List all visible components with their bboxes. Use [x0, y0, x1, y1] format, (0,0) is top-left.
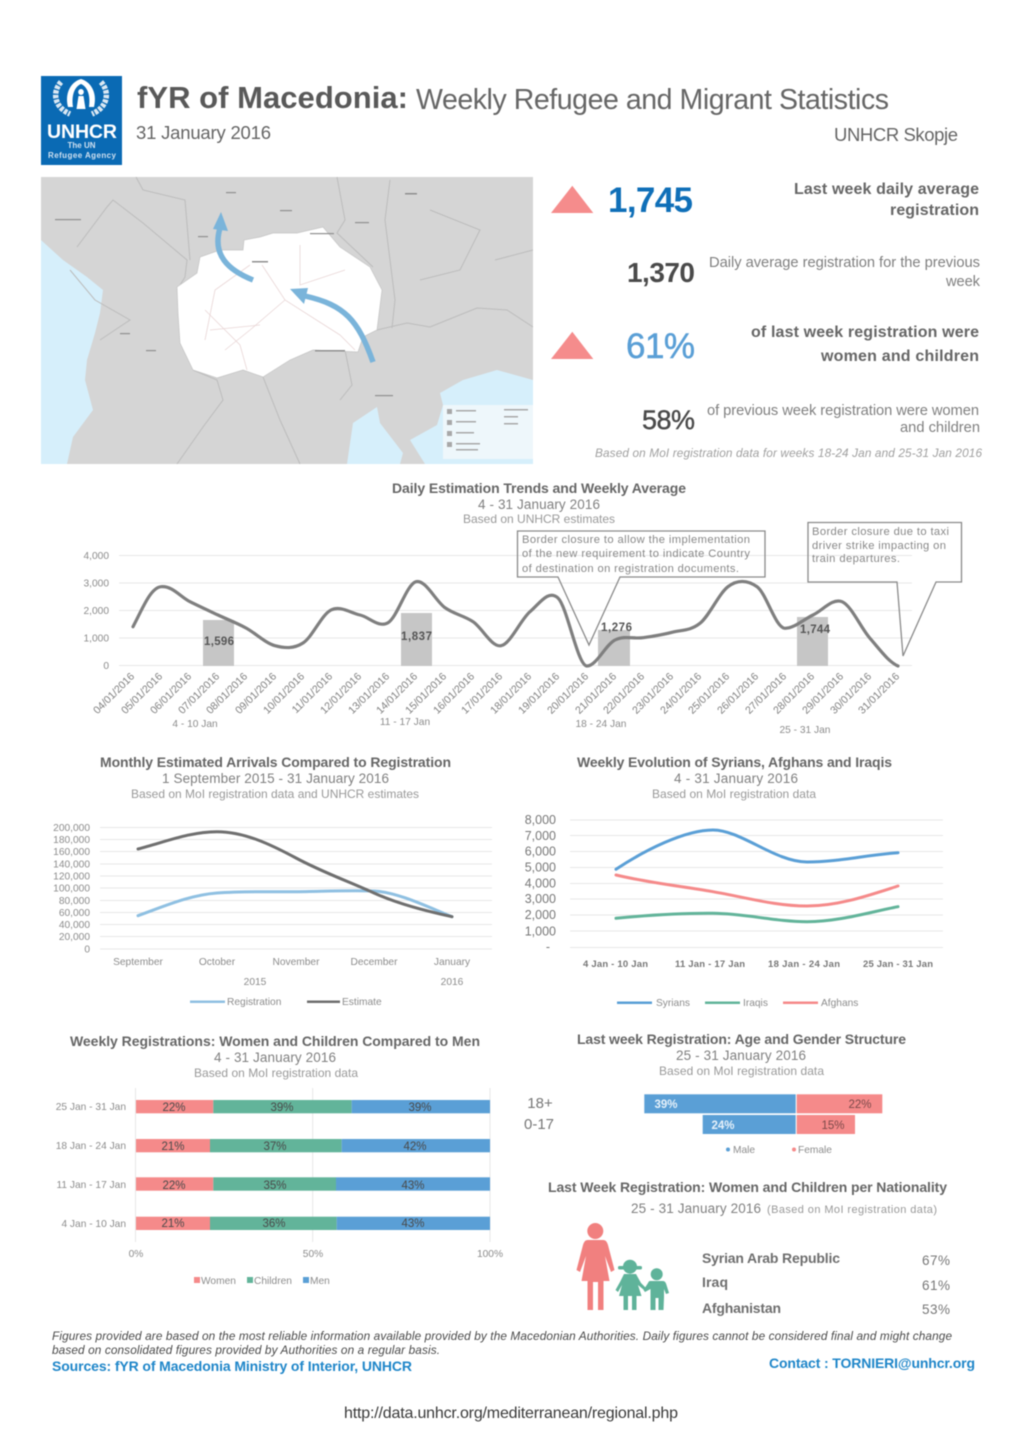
heading — [100, 754, 451, 801]
pyramid bars: 15% — [821, 1120, 845, 1132]
row: 11 - 17 Jan — [57, 1177, 490, 1192]
date axis labels: 27/01/2016 — [743, 671, 789, 717]
y axis labels: 4,000 — [525, 876, 556, 890]
UNHCR logo: UNHCR — [47, 121, 117, 143]
row: 18 - 24 Jan: 37% — [263, 1141, 287, 1153]
heading: Weekly Evolution of Syrians, Afghans and Iraqis — [577, 754, 892, 770]
fYR of Macedonia territory — [177, 227, 382, 378]
daily estimate line — [133, 581, 898, 666]
row: 11 - 17 Jan: 43% — [401, 1180, 425, 1192]
row: 25 - 31 Jan: 39% — [408, 1102, 432, 1114]
arrow: entry from Greece — [290, 288, 373, 362]
row: 4 - 10 Jan: 36% — [262, 1218, 286, 1230]
row: 18 - 24 Jan: 42% — [403, 1141, 427, 1153]
date: 31 January 2016 — [136, 122, 271, 143]
month labels: 2016 — [441, 977, 464, 988]
weekly average bars — [203, 613, 828, 666]
label: previous week women and children: of previous week registration were women — [707, 403, 979, 419]
date axis labels: 06/01/2016 — [148, 671, 194, 717]
date axis labels: 16/01/2016 — [431, 671, 477, 717]
nationality table: Afghanistan — [702, 1300, 781, 1316]
figure: 58%: 58% — [642, 405, 695, 435]
date axis labels: 31/01/2016 — [856, 671, 902, 717]
heading: 25 - 31 January 2016 — [676, 1048, 806, 1063]
y axis labels: 8,000 — [525, 813, 556, 827]
arrow: northbound route — [213, 212, 253, 280]
pyramid bars: 39% — [654, 1099, 678, 1111]
legend: Estimate — [342, 997, 382, 1008]
heading — [548, 1179, 947, 1216]
date axis labels: 17/01/2016 — [459, 671, 505, 717]
contact: Contact : TORNIERI@unhcr.org — [769, 1355, 975, 1371]
heading: Monthly Estimated Arrivals Compared to Registration — [100, 754, 451, 770]
map legend — [443, 405, 533, 459]
date axis labels: 18/01/2016 — [488, 671, 534, 717]
weekly average values: 1,276 — [601, 622, 632, 634]
week labels: 18 Jan - 24 Jan — [768, 959, 840, 970]
callout: taxi driver strike: train departures. — [812, 553, 900, 565]
heading: Based on MoI registration data — [659, 1064, 824, 1078]
heading: Daily Estimation Trends and Weekly Average — [392, 480, 686, 496]
row: 11 - 17 Jan: 22% — [162, 1180, 186, 1192]
pyramid bars: 22% — [848, 1099, 872, 1111]
legend: Women — [201, 1276, 236, 1287]
heading: 4 - 31 January 2016 — [674, 771, 798, 786]
weekly average values: 1,837 — [401, 631, 432, 643]
date axis labels: 05/01/2016 — [119, 671, 165, 717]
url: http://data.unhcr.org/mediterranean/regional.php — [344, 1405, 678, 1422]
y axis labels: 160,000 — [53, 847, 90, 858]
row: 18 - 24 Jan — [56, 1139, 490, 1153]
data note: Based on MoI registration data for weeks 18-24 Jan and 25-31 Jan 2016 — [595, 446, 982, 460]
callout: border closure registration requirement — [518, 531, 765, 645]
age labels: 0-17 — [524, 1116, 554, 1133]
date axis labels: 29/01/2016 — [800, 671, 846, 717]
legend — [194, 1276, 330, 1287]
label: previous week average — [709, 255, 981, 290]
roads — [205, 245, 355, 370]
heading: Based on MoI registration data and UNHCR estimates — [131, 787, 419, 801]
weekly average values: 1,744 — [800, 624, 831, 636]
disclaimer: Figures provided are based on the most reliable information available provided by the Macedonian Authorities. Daily figures cannot be considered final and might change — [52, 1329, 952, 1343]
heading — [577, 1031, 906, 1078]
UNHCR logo: The UN — [68, 141, 96, 150]
nationality table: 67% — [922, 1253, 950, 1268]
date axis labels: 19/01/2016 — [516, 671, 562, 717]
footer — [52, 1329, 975, 1422]
row: 25 - 31 Jan: 22% — [162, 1102, 186, 1114]
y axis labels: 1,000 — [84, 634, 109, 644]
y axis labels — [525, 813, 556, 954]
nationality table: 61% — [922, 1278, 950, 1293]
heading: Based on MoI registration data — [194, 1066, 358, 1080]
y axis labels: 1,000 — [525, 924, 556, 938]
nationality table: Iraq — [702, 1274, 728, 1290]
row: 4 - 10 Jan: 4 Jan - 10 Jan — [61, 1219, 126, 1230]
date axis labels: 09/01/2016 — [233, 671, 279, 717]
date axis labels: 12/01/2016 — [318, 671, 364, 717]
row: 4 - 10 Jan: 21% — [161, 1218, 185, 1230]
date axis labels: 04/01/2016 — [91, 671, 137, 717]
estimate line — [138, 832, 452, 917]
row: 4 - 10 Jan: 43% — [401, 1218, 425, 1230]
chart: age and gender structure — [524, 1031, 906, 1156]
panel: women and children per nationality — [548, 1179, 950, 1317]
heading: Based on MoI registration data — [652, 787, 816, 801]
age labels — [524, 1095, 554, 1133]
heading — [70, 1033, 480, 1080]
x axis labels: 100% — [477, 1249, 503, 1260]
callout: border closure registration requirement: of the new requirement to indicate Country — [522, 548, 750, 560]
week labels: 11 Jan - 17 Jan — [675, 959, 745, 970]
key figures panel — [551, 181, 982, 460]
row: 25 - 31 Jan: 25 Jan - 31 Jan — [56, 1102, 126, 1113]
row: 18 - 24 Jan: 21% — [161, 1141, 185, 1153]
nationality table — [702, 1250, 950, 1317]
x axis labels: 50% — [303, 1249, 323, 1260]
row: 4 - 10 Jan — [61, 1217, 490, 1230]
label: previous week average: week — [945, 274, 981, 290]
header — [41, 76, 958, 165]
title: Weekly Refugee and Migrant Statistics — [416, 84, 889, 116]
registration line — [138, 891, 452, 917]
y axis labels: 3,000 — [525, 892, 556, 906]
heading: 25 - 31 January 2016 — [631, 1201, 761, 1216]
y axis labels: 0 — [84, 944, 90, 956]
callout: taxi driver strike: Border closure due to taxi — [812, 526, 949, 538]
weekly average values — [204, 622, 831, 648]
office: UNHCR Skopje — [834, 124, 958, 145]
age labels: 18+ — [527, 1095, 553, 1112]
date axis labels: 13/01/2016 — [346, 671, 392, 717]
sea — [41, 240, 533, 464]
callout: taxi driver strike — [808, 522, 962, 656]
heading: Weekly Registrations: Women and Children Compared to Men — [70, 1033, 480, 1049]
y axis labels: 0 — [103, 661, 109, 672]
y axis labels — [84, 551, 109, 672]
month labels — [113, 957, 471, 988]
label: last week women and children — [751, 324, 979, 365]
Afghans line — [616, 875, 898, 906]
heading: 1 September 2015 - 31 January 2016 — [162, 771, 389, 786]
UNHCR logo: Refugee Agency — [48, 151, 117, 160]
callout: border closure registration requirement: of destination on registration documents. — [522, 563, 739, 575]
y axis labels: 200,000 — [53, 823, 90, 834]
row: 11 - 17 Jan: 35% — [263, 1180, 287, 1192]
label: last week daily average — [794, 181, 979, 219]
y axis labels: 2,000 — [84, 606, 109, 617]
y axis labels: - — [546, 940, 550, 954]
y axis labels: 3,000 — [84, 578, 109, 590]
x axis labels — [129, 1249, 503, 1260]
heading: (Based on MoI registration data) — [767, 1204, 937, 1216]
date axis labels: 11/01/2016 — [290, 671, 335, 716]
legend: Syrians — [656, 998, 690, 1009]
date axis labels: 07/01/2016 — [176, 671, 222, 717]
date axis labels: 25/01/2016 — [686, 671, 732, 717]
date axis labels: 21/01/2016 — [573, 671, 619, 717]
date axis labels — [91, 671, 902, 717]
map panel — [41, 177, 533, 464]
y axis labels: 20,000 — [59, 932, 90, 943]
date axis labels: 08/01/2016 — [204, 671, 250, 717]
y axis labels: 40,000 — [59, 920, 90, 931]
figure: 1,370: 1,370 — [627, 257, 695, 288]
chart: weekly registrations women and children compared to men — [56, 1033, 503, 1287]
pyramid bars — [644, 1094, 882, 1134]
icon: boy — [644, 1268, 669, 1310]
week labels: 25 - 31 Jan — [780, 725, 830, 736]
date axis labels: 22/01/2016 — [601, 671, 647, 717]
title: fYR of Macedonia: — [137, 80, 408, 115]
date axis labels: 28/01/2016 — [771, 671, 817, 717]
icon: girl — [616, 1260, 646, 1310]
y axis labels: 4,000 — [84, 551, 109, 562]
heading: 4 - 31 January 2016 — [478, 497, 600, 512]
figure: 1,745: 1,745 — [608, 181, 693, 220]
borders — [70, 177, 533, 464]
heading — [577, 754, 892, 801]
chart: weekly evolution of Syrians, Afghans and Iraqis — [525, 754, 943, 1009]
label: previous week women and children — [707, 403, 980, 436]
y axis labels — [53, 823, 90, 956]
up triangle: daily average — [551, 186, 593, 213]
label: last week women and children: of last week registration were — [751, 324, 979, 341]
disclaimer: based on consolidated figures provided by Authorities on a regular basis. — [52, 1343, 440, 1357]
label: previous week women and children: and children — [900, 420, 980, 436]
y axis labels: 7,000 — [525, 829, 556, 843]
pyramid bars: 24% — [711, 1120, 735, 1132]
month labels: September — [113, 957, 164, 968]
y axis labels: 6,000 — [525, 844, 556, 858]
Syrians line — [616, 830, 898, 869]
y axis labels: 100,000 — [53, 884, 90, 894]
date axis labels: 26/01/2016 — [715, 671, 761, 717]
up triangle: women and children — [551, 332, 593, 359]
month labels: November — [272, 957, 320, 968]
date axis labels: 20/01/2016 — [545, 671, 591, 717]
date axis labels: 30/01/2016 — [828, 671, 874, 717]
y axis labels: 80,000 — [59, 896, 90, 907]
weekly average values: 1,596 — [204, 636, 234, 648]
heading: 4 - 31 January 2016 — [214, 1050, 336, 1065]
sources: Sources: fYR of Macedonia Ministry of Interior, UNHCR — [52, 1358, 412, 1374]
nationality table: Syrian Arab Republic — [702, 1250, 840, 1266]
date axis labels: 10/01/2016 — [261, 671, 307, 717]
heading: Last week Registration: Age and Gender Structure — [577, 1031, 906, 1047]
label: last week daily average: registration — [890, 202, 979, 219]
week labels: 25 Jan - 31 Jan — [863, 959, 933, 970]
y axis labels: 2,000 — [525, 908, 556, 922]
label: previous week average: Daily average registration for the previous — [709, 255, 980, 271]
figure: 61%: 61% — [626, 327, 695, 366]
y axis labels: 60,000 — [59, 908, 90, 919]
date axis labels: 23/01/2016 — [630, 671, 676, 717]
y axis labels: 140,000 — [53, 860, 90, 870]
week labels — [583, 959, 933, 970]
y axis labels: 180,000 — [53, 835, 90, 846]
month labels: October — [199, 957, 236, 968]
disclaimer — [52, 1329, 952, 1357]
legend: Female — [798, 1145, 832, 1156]
month labels: January — [434, 957, 471, 968]
date axis labels: 24/01/2016 — [658, 671, 704, 717]
week labels: 11 - 17 Jan — [380, 717, 430, 728]
month labels: 2015 — [244, 977, 267, 988]
date axis labels: 15/01/2016 — [403, 671, 449, 717]
UNHCR logo — [41, 76, 122, 165]
heading: Last Week Registration: Women and Children per Nationality — [548, 1179, 947, 1195]
heading: Based on UNHCR estimates — [463, 512, 615, 526]
legend — [726, 1145, 832, 1156]
callout: taxi driver strike: driver strike impacting on — [812, 540, 946, 552]
legend — [190, 997, 382, 1008]
y axis labels: 120,000 — [53, 872, 90, 882]
label: last week women and children: women and children — [820, 348, 979, 365]
week labels: 4 Jan - 10 Jan — [583, 959, 648, 970]
legend — [617, 998, 858, 1009]
chart: daily estimation trends — [84, 480, 962, 736]
callout: border closure registration requirement: Border closure to allow the implementation — [522, 534, 750, 546]
legend: Afghans — [821, 998, 858, 1009]
chart: monthly estimated arrivals compared to registration — [53, 754, 492, 1008]
row: 25 - 31 Jan: 39% — [270, 1102, 294, 1114]
y axis labels: 5,000 — [525, 860, 556, 874]
label: last week daily average: Last week daily average — [794, 181, 979, 198]
legend: Men — [310, 1276, 330, 1287]
title — [137, 80, 889, 116]
Iraqis line — [616, 907, 898, 922]
row: 25 - 31 Jan — [56, 1100, 490, 1114]
legend: Male — [733, 1145, 755, 1156]
row: 11 - 17 Jan: 11 Jan - 17 Jan — [57, 1180, 126, 1191]
x axis labels: 0% — [129, 1249, 143, 1260]
week labels — [172, 717, 830, 736]
week labels: 4 - 10 Jan — [172, 719, 218, 730]
icon: woman — [576, 1223, 614, 1310]
heading — [392, 480, 686, 526]
legend: Iraqis — [743, 998, 768, 1009]
place marks — [55, 192, 417, 396]
date axis labels: 14/01/2016 — [374, 671, 420, 717]
legend: Registration — [227, 997, 281, 1008]
nationality table: 53% — [922, 1302, 950, 1317]
row: 18 - 24 Jan: 18 Jan - 24 Jan — [56, 1141, 126, 1152]
month labels: December — [350, 957, 398, 968]
week labels: 18 - 24 Jan — [576, 719, 626, 730]
legend: Children — [254, 1276, 292, 1287]
